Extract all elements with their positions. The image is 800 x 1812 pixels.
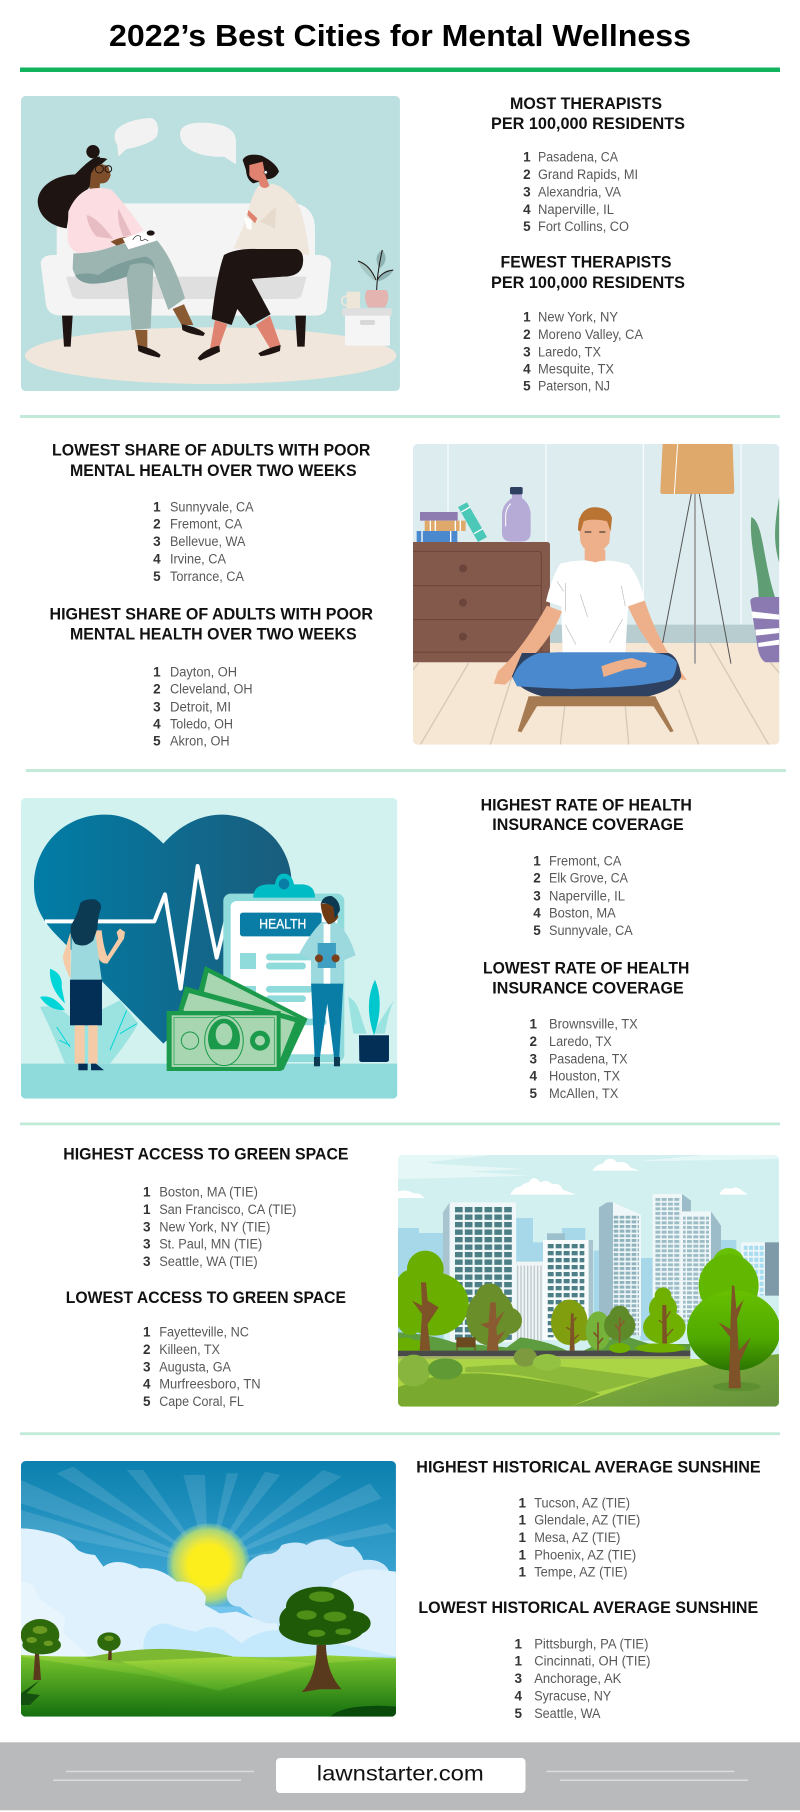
illustration: health coverage: [21, 798, 397, 1099]
list: highest green space: 1: [143, 1185, 151, 1200]
footer: lawnstarter.com: [317, 1763, 484, 1786]
illustration: meditating man: [413, 444, 780, 745]
list: fewest therapists: [523, 309, 643, 394]
list: highest green space: [143, 1185, 296, 1269]
list: lowest share: Bellevue, WA: [170, 534, 245, 549]
list: lowest share: 1: [153, 500, 161, 515]
heading: lowest insurance: INSURANCE COVERAGE: [492, 979, 684, 997]
list: highest insurance: 3: [533, 888, 541, 903]
list: lowest sunshine: Pittsburgh, PA (TIE): [534, 1636, 648, 1651]
list: highest green space: St. Paul, MN (TIE): [159, 1237, 262, 1252]
list: highest insurance: [533, 853, 633, 938]
list: highest green space: 3: [143, 1219, 151, 1234]
list: highest sunshine: [518, 1495, 640, 1580]
list: fewest therapists: 4: [523, 362, 531, 377]
list: highest sunshine: Tempe, AZ (TIE): [534, 1565, 628, 1580]
list: lowest sunshine: 5: [514, 1706, 522, 1721]
list: highest share: Dayton, OH: [170, 664, 237, 679]
panel: sunshine: [21, 1459, 761, 1721]
list: highest sunshine: Phoenix, AZ (TIE): [534, 1547, 636, 1562]
list: lowest green space: Augusta, GA: [159, 1359, 231, 1374]
list: highest insurance: Sunnyvale, CA: [549, 923, 633, 938]
list: most therapists: [523, 150, 638, 234]
list: lowest green space: 4: [143, 1377, 151, 1392]
list: lowest share: 5: [153, 569, 161, 584]
list: lowest share: 2: [153, 517, 161, 532]
heading: most therapists: PER 100,000 RESIDENTS: [491, 115, 685, 133]
list: most therapists: Alexandria, VA: [538, 185, 621, 200]
heading: fewest therapists: FEWEST THERAPISTS: [500, 254, 672, 272]
heading: highest insurance: INSURANCE COVERAGE: [492, 816, 684, 834]
list: highest sunshine: 1: [518, 1547, 526, 1562]
list: fewest therapists: Moreno Valley, CA: [538, 327, 643, 342]
list: lowest green space: Cape Coral, FL: [159, 1394, 244, 1409]
heading: lowest share: LOWEST SHARE OF ADULTS WITH POOR: [52, 442, 370, 460]
list: highest insurance: 1: [533, 853, 541, 868]
list: fewest therapists: 2: [523, 327, 531, 342]
heading: lowest share: MENTAL HEALTH OVER TWO WEEKS: [70, 462, 357, 480]
list: lowest insurance: 2: [529, 1034, 537, 1049]
list: most therapists: 4: [523, 202, 531, 217]
heading: lowest green space: LOWEST ACCESS TO GREEN SPACE: [66, 1289, 346, 1307]
list: lowest insurance: 1: [529, 1017, 537, 1032]
panel: poor mental health: [50, 442, 780, 749]
list: lowest sunshine: Cincinnati, OH (TIE): [534, 1654, 650, 1669]
list: highest share: Cleveland, OH: [170, 682, 253, 697]
list: highest share: 5: [153, 734, 161, 749]
list: highest share: [153, 664, 253, 749]
list: most therapists: 3: [523, 185, 531, 200]
list: lowest share: Irvine, CA: [170, 552, 226, 567]
list: fewest therapists: New York, NY: [538, 309, 618, 324]
list: most therapists: Pasadena, CA: [538, 150, 618, 165]
list: lowest green space: Killeen, TX: [159, 1342, 220, 1357]
list: highest sunshine: 1: [518, 1565, 526, 1580]
list: lowest insurance: Laredo, TX: [549, 1034, 612, 1049]
list: lowest sunshine: 1: [514, 1654, 522, 1669]
list: lowest share: 3: [153, 534, 161, 549]
list: fewest therapists: 3: [523, 344, 531, 359]
list: lowest green space: 3: [143, 1359, 151, 1374]
list: highest share: Toledo, OH: [170, 716, 233, 731]
list: lowest sunshine: Anchorage, AK: [534, 1671, 621, 1686]
list: most therapists: 1: [523, 150, 531, 165]
list: highest insurance: 5: [533, 923, 541, 938]
list: highest share: Akron, OH: [170, 734, 230, 749]
list: highest share: 4: [153, 716, 161, 731]
list: highest insurance: Naperville, IL: [549, 888, 625, 903]
list: lowest green space: 1: [143, 1325, 151, 1340]
title: 2022’s Best Cities for Mental Wellness: [109, 18, 691, 53]
list: lowest insurance: 3: [529, 1051, 537, 1066]
illustration: therapy session: [21, 96, 400, 391]
list: lowest green space: Fayetteville, NC: [159, 1325, 249, 1340]
list: lowest sunshine: Syracuse, NY: [534, 1688, 611, 1703]
list: highest green space: San Francisco, CA (TIE): [159, 1202, 296, 1217]
list: lowest sunshine: [514, 1636, 650, 1721]
list: fewest therapists: 1: [523, 309, 531, 324]
list: lowest sunshine: 3: [514, 1671, 522, 1686]
heading: lowest share: [52, 442, 370, 480]
list: highest insurance: Boston, MA: [549, 906, 616, 921]
list: highest share: 1: [153, 664, 161, 679]
list: lowest sunshine: 4: [514, 1688, 522, 1703]
heading: fewest therapists: [491, 254, 685, 292]
list: fewest therapists: Paterson, NJ: [538, 379, 610, 394]
heading: most therapists: [491, 95, 685, 133]
list: most therapists: Grand Rapids, MI: [538, 167, 638, 182]
list: lowest insurance: Pasadena, TX: [549, 1051, 628, 1066]
list: lowest sunshine: Seattle, WA: [534, 1706, 600, 1721]
heading: lowest sunshine: LOWEST HISTORICAL AVERAGE SUNSHINE: [418, 1599, 758, 1617]
list: highest insurance: 4: [533, 906, 541, 921]
list: lowest insurance: 4: [529, 1069, 537, 1084]
heading: highest sunshine: HIGHEST HISTORICAL AVERAGE SUNSHINE: [416, 1459, 761, 1477]
list: lowest green space: Murfreesboro, TN: [159, 1377, 261, 1392]
heading: lowest insurance: LOWEST RATE OF HEALTH: [483, 959, 689, 977]
illustration: sunny landscape: [21, 1461, 396, 1717]
panel: therapists: [21, 95, 685, 394]
heading: fewest therapists: PER 100,000 RESIDENTS: [491, 274, 685, 292]
heading: highest green space: HIGHEST ACCESS TO GREEN SPACE: [63, 1145, 349, 1163]
footer: [0, 1742, 800, 1810]
list: highest green space: 3: [143, 1237, 151, 1252]
list: highest sunshine: 1: [518, 1495, 526, 1510]
panel: green space: [63, 1145, 780, 1409]
heading: lowest insurance: [483, 959, 689, 997]
list: highest green space: New York, NY (TIE): [159, 1219, 270, 1234]
panel: health insurance: [21, 796, 692, 1101]
list: lowest green space: [143, 1325, 261, 1409]
list: lowest share: Torrance, CA: [170, 569, 244, 584]
list: fewest therapists: Laredo, TX: [538, 344, 601, 359]
list: highest green space: 1: [143, 1202, 151, 1217]
list: highest sunshine: Tucson, AZ (TIE): [534, 1495, 630, 1510]
list: highest sunshine: 1: [518, 1513, 526, 1528]
list: highest share: 3: [153, 699, 161, 714]
heading: highest share: [50, 605, 373, 644]
list: highest sunshine: Glendale, AZ (TIE): [534, 1513, 640, 1528]
list: lowest share: Fremont, CA: [170, 517, 242, 532]
list: lowest share: 4: [153, 552, 161, 567]
list: lowest insurance: McAllen, TX: [549, 1086, 618, 1101]
heading: highest share: HIGHEST SHARE OF ADULTS WITH POOR: [50, 605, 373, 623]
list: lowest share: Sunnyvale, CA: [170, 500, 254, 515]
list: lowest insurance: [529, 1017, 638, 1101]
list: lowest sunshine: 1: [514, 1636, 522, 1651]
list: lowest share: [153, 500, 254, 584]
list: lowest insurance: 5: [529, 1086, 537, 1101]
heading: most therapists: MOST THERAPISTS: [510, 95, 662, 113]
list: highest green space: 3: [143, 1254, 151, 1269]
list: most therapists: Naperville, IL: [538, 202, 614, 217]
list: fewest therapists: 5: [523, 379, 531, 394]
list: lowest green space: 2: [143, 1342, 150, 1357]
list: highest insurance: 2: [533, 871, 541, 886]
list: lowest green space: 5: [143, 1394, 151, 1409]
list: highest insurance: Fremont, CA: [549, 853, 621, 868]
illustration: city park: [392, 1155, 780, 1407]
list: highest green space: Seattle, WA (TIE): [159, 1254, 258, 1269]
list: most therapists: 2: [523, 167, 531, 182]
heading: highest share: MENTAL HEALTH OVER TWO WEEKS: [70, 626, 357, 644]
list: highest sunshine: Mesa, AZ (TIE): [534, 1530, 620, 1545]
heading: highest insurance: [481, 796, 692, 834]
list: lowest insurance: Houston, TX: [549, 1069, 620, 1084]
illustration: health coverage: HEALTH: [259, 917, 306, 932]
list: highest sunshine: 1: [518, 1530, 526, 1545]
list: highest share: 2: [153, 682, 161, 697]
list: highest share: Detroit, MI: [170, 699, 231, 714]
list: most therapists: Fort Collins, CO: [538, 219, 629, 234]
list: fewest therapists: Mesquite, TX: [538, 362, 614, 377]
list: most therapists: 5: [523, 219, 531, 234]
list: highest green space: Boston, MA (TIE): [159, 1185, 258, 1200]
heading: highest insurance: HIGHEST RATE OF HEALTH: [481, 796, 692, 814]
list: highest insurance: Elk Grove, CA: [549, 871, 628, 886]
list: lowest insurance: Brownsville, TX: [549, 1017, 638, 1032]
